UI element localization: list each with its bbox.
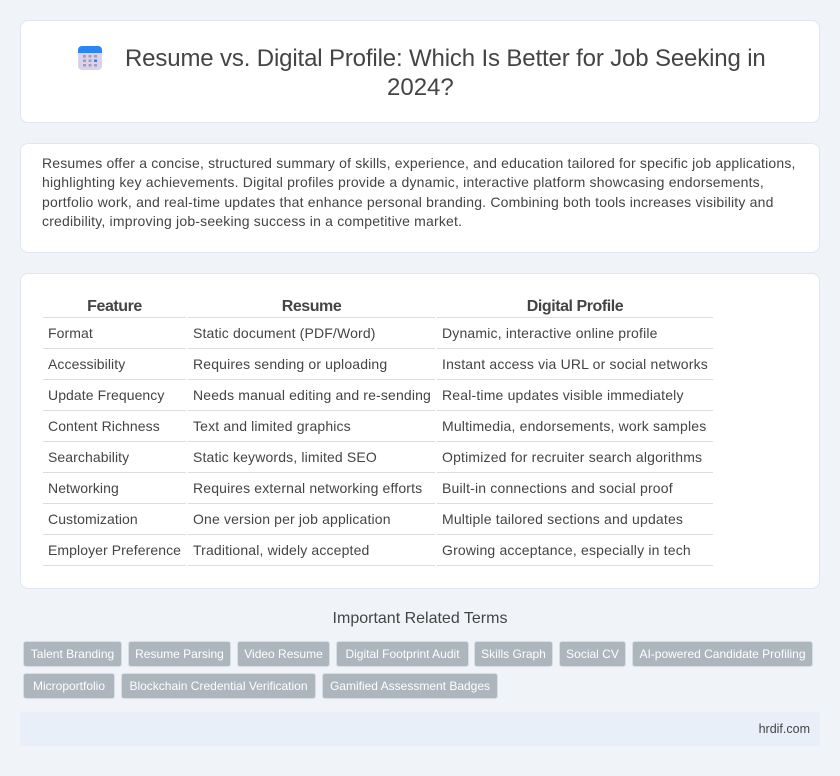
summary text: credibility, improving job-seeking success in a competitive market. (42, 213, 462, 229)
comparison table: Update Frequency (48, 387, 164, 403)
comparison table (43, 298, 713, 566)
comparison table: One version per job application (193, 511, 391, 527)
comparison table: Feature (87, 298, 142, 315)
related terms tags: Blockchain Credential Verification (129, 679, 308, 693)
related terms tags: Microportfolio (33, 679, 105, 693)
comparison table: Dynamic, interactive online profile (442, 325, 658, 341)
panel: comparison table (20, 273, 820, 589)
summary text: Resumes offer a concise, structured summary of skills, experience, and education tailored for specific job applications, (42, 155, 796, 171)
comparison table: Requires sending or uploading (193, 356, 387, 372)
comparison table: Multiple tailored sections and updates (442, 511, 683, 527)
comparison table: Content Richness (48, 418, 160, 434)
related terms tags: Skills Graph (481, 647, 546, 661)
comparison table: Customization (48, 511, 138, 527)
panel: summary (20, 143, 820, 253)
related terms tags: AI-powered Candidate Profiling (639, 647, 806, 661)
comparison table: Optimized for recruiter search algorithms (442, 449, 702, 465)
footer bar (20, 712, 820, 746)
related terms tags: Social CV (566, 647, 619, 661)
comparison table: Real-time updates visible immediately (442, 387, 684, 403)
comparison table: Employer Preference (48, 542, 181, 558)
comparison table: Format (48, 325, 93, 341)
related terms tags: Digital Footprint Audit (345, 647, 460, 661)
comparison table: Needs manual editing and re-sending (193, 387, 431, 403)
summary text (42, 155, 796, 229)
comparison table: Growing acceptance, especially in tech (442, 542, 691, 558)
summary text: portfolio work, and real-time updates that enhance personal branding. Combining both tools increases visibility and (42, 194, 774, 210)
summary text: highlighting key achievements. Digital profiles provide a dynamic, interactive platform showcasing endorsements, (42, 174, 764, 190)
comparison table: Digital Profile (527, 298, 623, 315)
related terms heading: Important Related Terms (333, 610, 507, 627)
icon: calendar (78, 46, 102, 70)
comparison table: Multimedia, endorsements, work samples (442, 418, 706, 434)
comparison table: Static keywords, limited SEO (193, 449, 377, 465)
comparison table: Resume (282, 298, 341, 315)
title: Resume vs. Digital Profile: Which Is Better for Job Seeking in (125, 45, 766, 72)
comparison table: Searchability (48, 449, 129, 465)
comparison table: Traditional, widely accepted (193, 542, 369, 558)
title panel (20, 20, 820, 123)
related terms tags: Talent Branding (31, 647, 114, 661)
comparison table: Static document (PDF/Word) (193, 325, 376, 341)
comparison table: Built-in connections and social proof (442, 480, 673, 496)
related terms tags: Gamified Assessment Badges (330, 679, 490, 693)
title: 2024? (387, 74, 454, 101)
comparison table: Text and limited graphics (193, 418, 351, 434)
comparison table: Accessibility (48, 356, 125, 372)
title (125, 45, 766, 101)
related terms tags: Resume Parsing (135, 647, 224, 661)
comparison table: Instant access via URL or social networks (442, 356, 708, 372)
footer credit: hrdif.com (759, 722, 810, 736)
comparison table: Requires external networking efforts (193, 480, 422, 496)
comparison table: Networking (48, 480, 119, 496)
related terms tags: Video Resume (244, 647, 323, 661)
